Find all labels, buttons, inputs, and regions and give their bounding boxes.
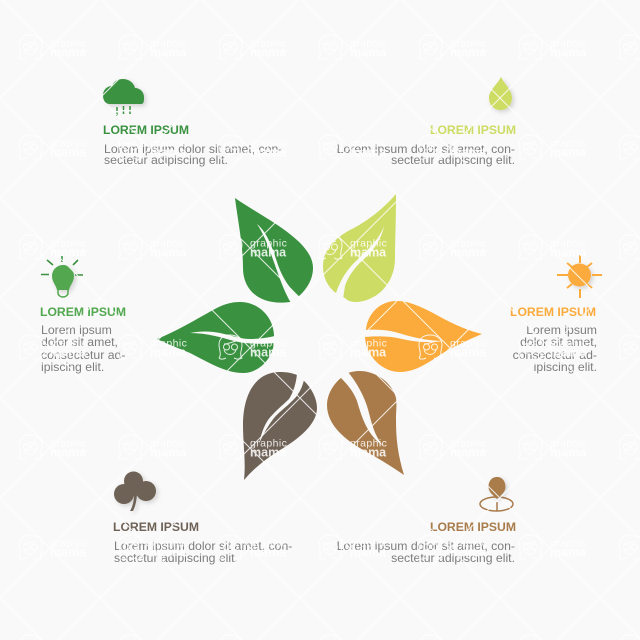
panel: top left xyxy=(103,79,282,167)
text block: ipiscing elit. xyxy=(41,360,104,374)
text block: Lorem ipsum xyxy=(526,323,597,337)
leaf: dark green top left xyxy=(235,198,313,303)
icon: clover xyxy=(114,472,156,511)
leaf: green left xyxy=(157,302,275,373)
icon: sun xyxy=(557,255,602,298)
heading: LOREM IPSUM xyxy=(103,123,189,137)
heading: LOREM IPSUM xyxy=(510,305,596,319)
panel: bottom left xyxy=(113,472,292,565)
leaf: taupe bottom left xyxy=(243,372,317,480)
heading: LOREM IPSUM xyxy=(430,520,516,534)
icon: light bulb xyxy=(41,256,83,297)
text block: dolor sit amet, xyxy=(41,335,118,349)
panel: top right xyxy=(337,77,516,167)
panel: left xyxy=(40,256,126,374)
leaf: orange right xyxy=(365,301,482,372)
heading: LOREM IPSUM xyxy=(430,123,516,137)
panel: bottom right xyxy=(337,477,516,565)
icon: water drop xyxy=(489,77,512,110)
text block: consectetur ad- xyxy=(41,348,125,362)
text block: Lorem ipsum dolor sit amet, con- xyxy=(337,539,515,553)
icon: location pin xyxy=(480,477,513,511)
text block: Lorem ipsum dolor sit amet, con- xyxy=(114,539,292,553)
text block: sectetur adipiscing elit. xyxy=(391,153,515,167)
text block: dolor sit amet, xyxy=(520,335,597,349)
text block: Lorem ipsum dolor sit amet, con- xyxy=(337,142,515,156)
text block: Lorem ipsum xyxy=(41,323,112,337)
heading: LOREM IPSUM xyxy=(40,305,126,319)
icon: rain cloud xyxy=(103,79,144,116)
text block: Lorem ipsum dolor sit amet, con- xyxy=(104,142,282,156)
text block: sectetur adipiscing elit. xyxy=(104,153,228,167)
leaf flower diagram xyxy=(157,194,482,480)
leaf: lime top right xyxy=(323,194,396,302)
text block: sectetur adipiscing elit. xyxy=(391,551,515,565)
heading: LOREM IPSUM xyxy=(113,520,199,534)
leaf: brown bottom right xyxy=(327,371,404,475)
panel: right xyxy=(510,255,602,374)
text block: consectetur ad- xyxy=(513,348,597,362)
text block: ipiscing elit. xyxy=(534,360,597,374)
text block: sectetur adipiscing elit. xyxy=(114,551,238,565)
